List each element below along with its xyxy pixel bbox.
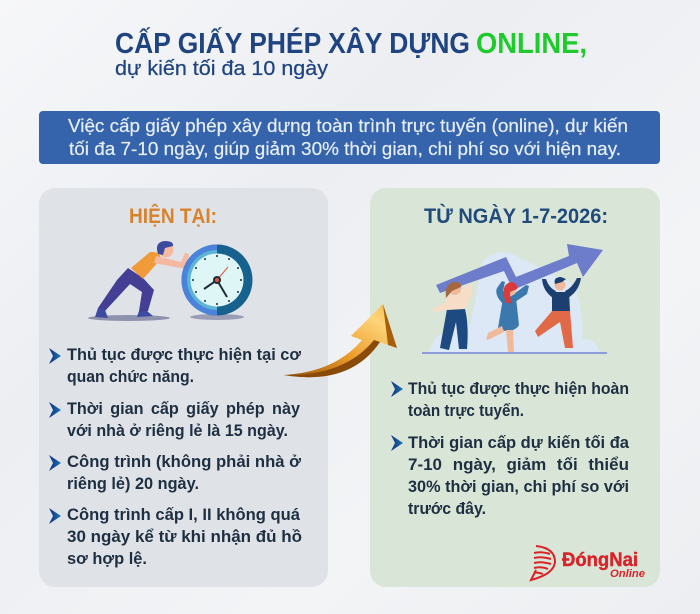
title: ONLINE, bbox=[476, 28, 587, 60]
logo: Dong Nai Online bbox=[531, 546, 645, 580]
heading: from date: TỪ NGÀY 1-7-2026: bbox=[424, 204, 608, 228]
arrow: gold curved transition bbox=[284, 304, 397, 377]
bullet list: from date: 30% thời gian, chi phí so với bbox=[408, 477, 629, 496]
bullet list: from date: Thủ tục được thực hiện hoàn bbox=[408, 379, 629, 398]
summary banner: tối đa 7-10 ngày, giúp giảm 30% thời gian, chi phí so với hiện nay. bbox=[69, 138, 621, 159]
bullet list: from date: trước đây. bbox=[408, 499, 486, 518]
illustration: people carrying arrow bbox=[422, 244, 607, 354]
bullet list: from date bbox=[391, 379, 630, 518]
title bbox=[115, 26, 587, 80]
bullet list: current: 30 ngày kể từ khi nhận đủ hồ bbox=[67, 527, 302, 546]
panel: from 1-7-2026 bbox=[370, 188, 660, 587]
logo: Dong Nai Online: ĐóngNai bbox=[562, 550, 638, 571]
title: dự kiến tối đa 10 ngày bbox=[115, 57, 329, 80]
bullet list: current: với nhà ở riêng lẻ là 15 ngày. bbox=[67, 421, 288, 440]
panel: current bbox=[39, 188, 328, 587]
title: CẤP GIẤY PHÉP XÂY DỰNG bbox=[115, 26, 470, 60]
summary banner: Việc cấp giấy phép xây dựng toàn trình trực tuyến (online), dự kiến bbox=[68, 115, 628, 136]
bullet list: current: quan chức năng. bbox=[67, 367, 194, 386]
bullet list: current: Công trình (không phải nhà ở bbox=[67, 452, 302, 471]
heading: current: HIỆN TẠI: bbox=[129, 204, 217, 228]
bullet list: current: riêng lẻ) 20 ngày. bbox=[67, 474, 199, 493]
bullet list: from date: 7-10 ngày, giảm tối thiểu bbox=[408, 455, 629, 474]
bullet list: from date: Thời gian cấp dự kiến tối đa bbox=[408, 433, 630, 452]
summary banner bbox=[39, 111, 660, 164]
bullet list: current bbox=[49, 345, 302, 568]
bullet list: from date: toàn trực tuyến. bbox=[408, 401, 524, 420]
bullet list: current: Thời gian cấp giấy phép này bbox=[67, 399, 301, 418]
bullet list: current: Thủ tục được thực hiện tại cơ bbox=[67, 345, 302, 364]
logo: Dong Nai Online: Online bbox=[610, 568, 645, 580]
bullet list: current: sơ hợp lệ. bbox=[67, 549, 147, 568]
bullet list: current: Công trình cấp I, II không quá bbox=[67, 505, 301, 524]
icon: person pushing clock bbox=[88, 241, 252, 321]
